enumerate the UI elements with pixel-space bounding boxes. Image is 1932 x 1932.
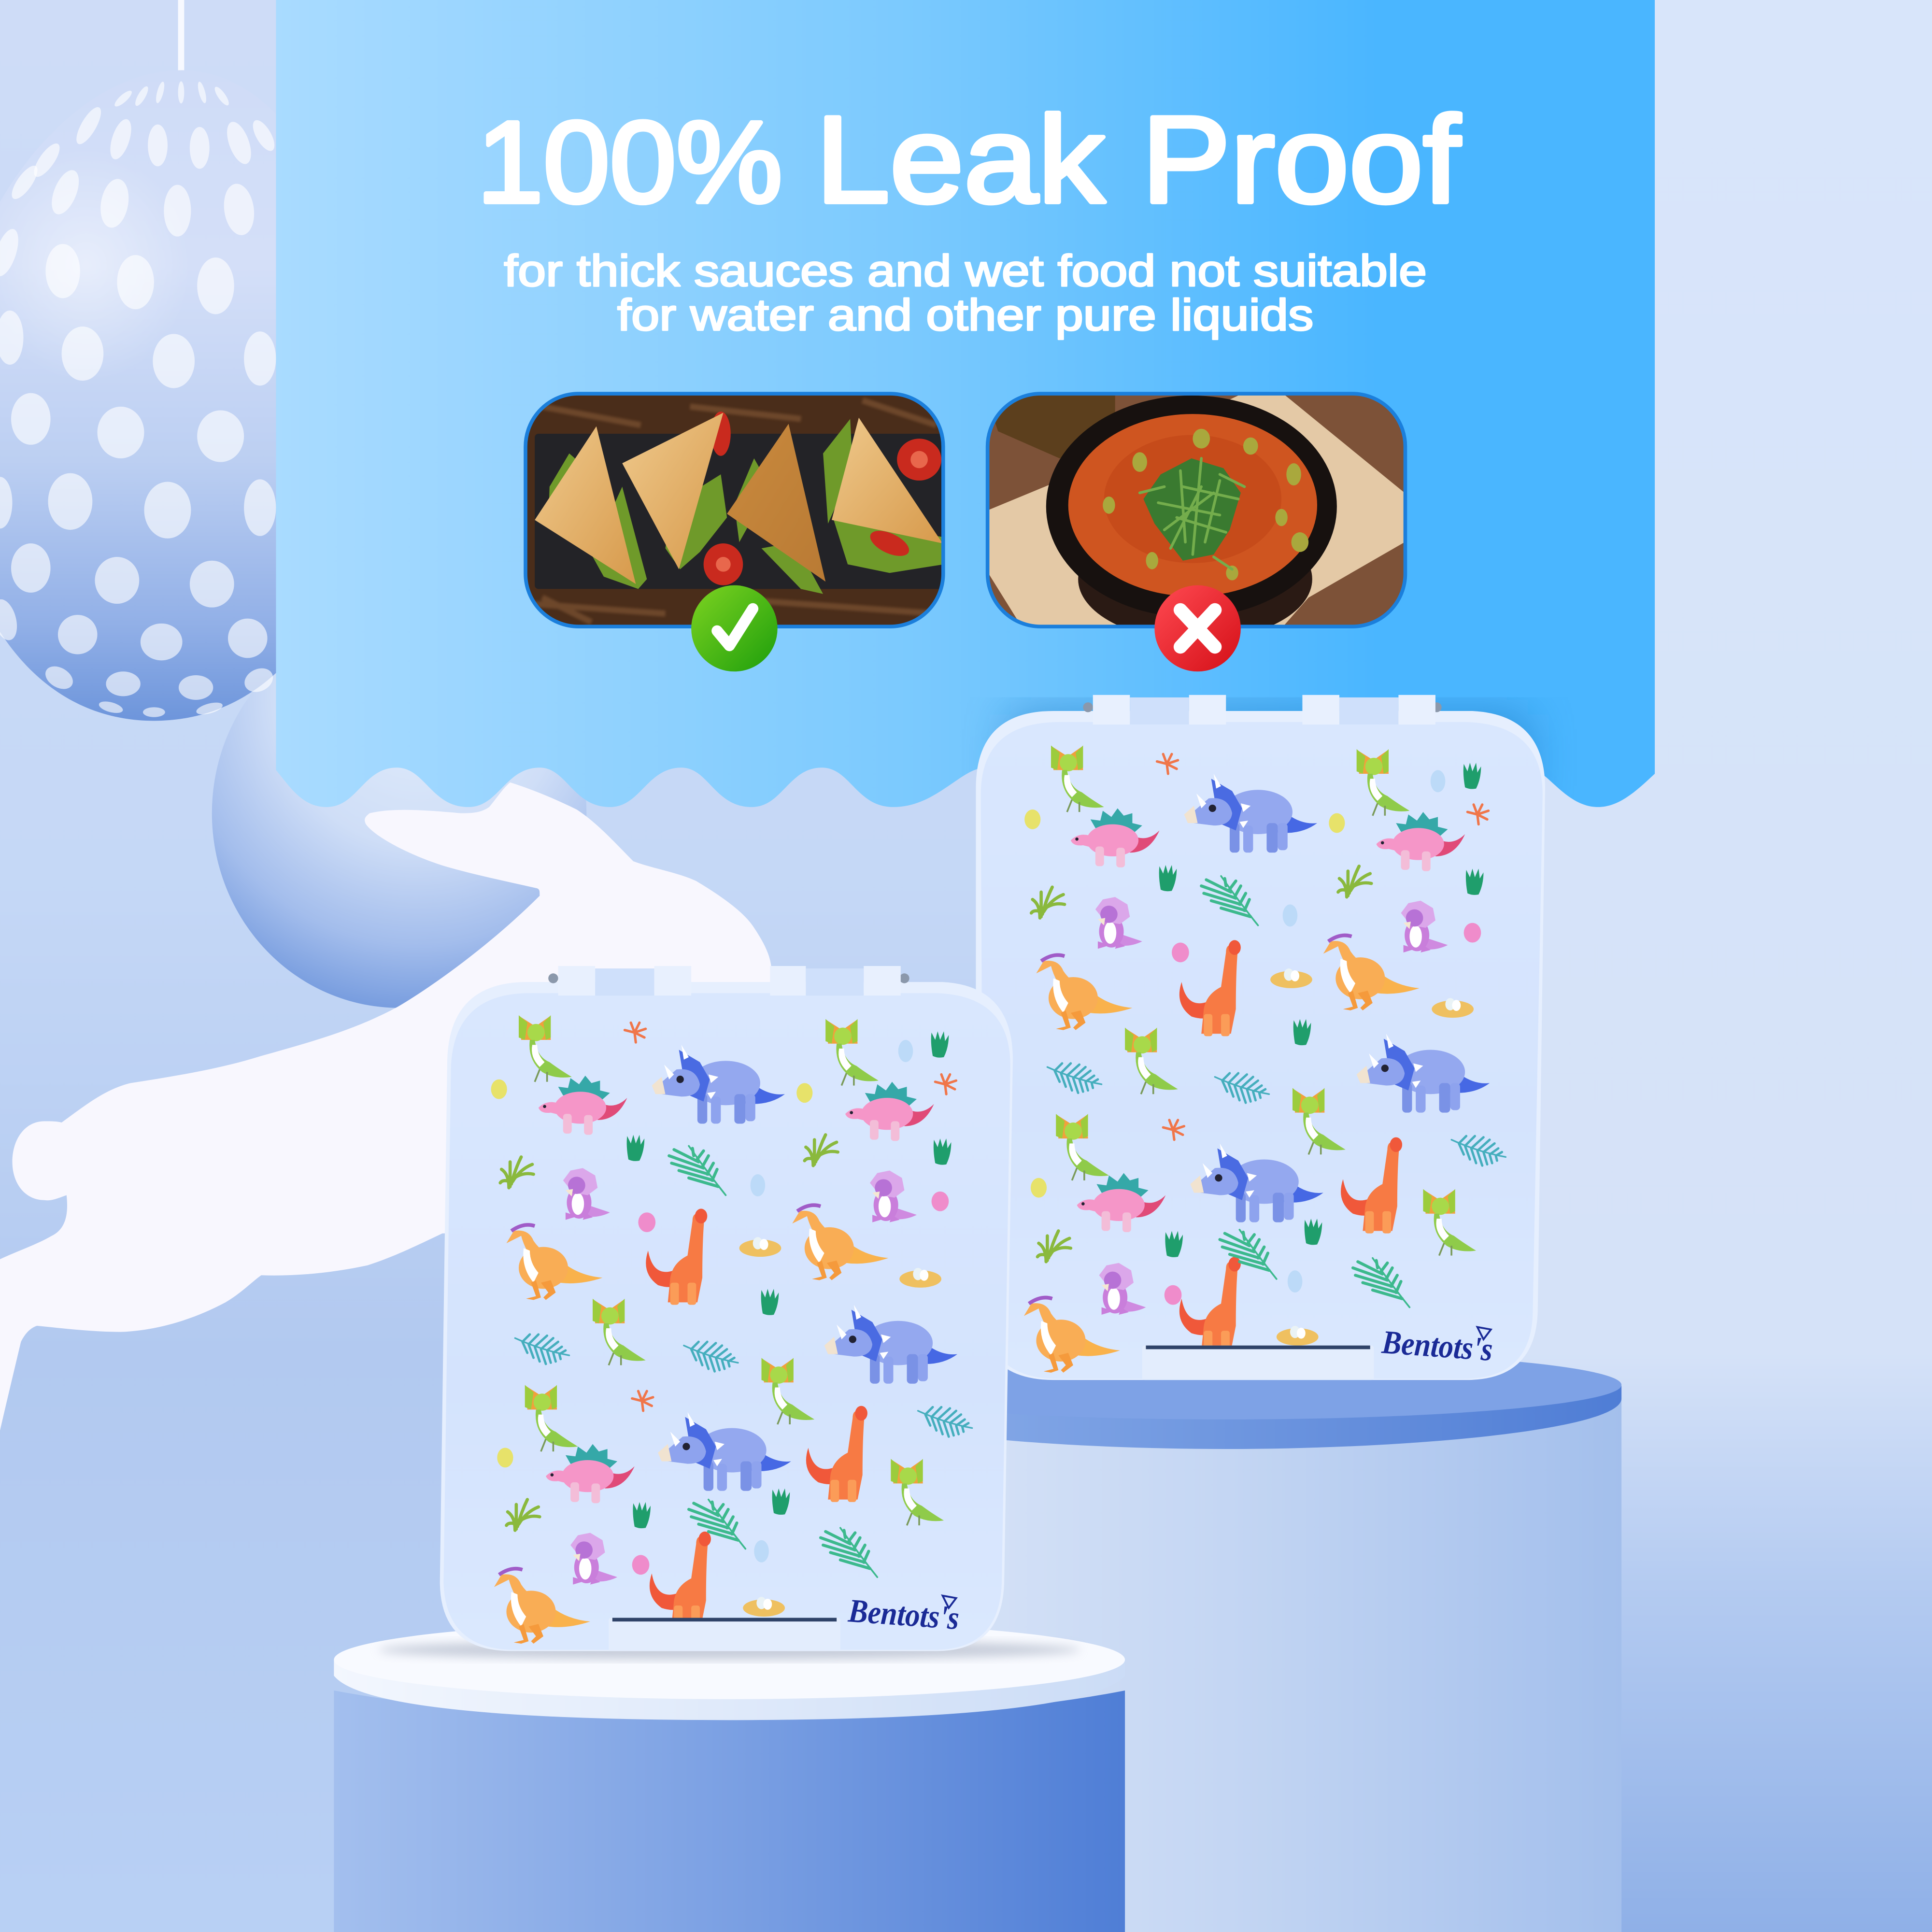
hinges [1083, 695, 1442, 724]
lunchbox front [440, 966, 1013, 1651]
brand logo: Bentots's [1380, 1323, 1494, 1368]
photo: sandwiches [524, 392, 945, 628]
lettuce [548, 419, 944, 594]
subtitle: for thick sauces and wet food not suitable [504, 246, 1427, 296]
dinosaur pattern [491, 1015, 972, 1644]
hanging decorative egg [0, 0, 369, 721]
hinges [548, 966, 909, 995]
panel shadow [1010, 715, 1528, 801]
subtitle [504, 246, 1427, 340]
rabbit silhouette [0, 782, 771, 1431]
latch [1142, 1346, 1374, 1380]
photo: soup [986, 392, 1407, 641]
box body [976, 711, 1545, 1380]
icon: red cross [1154, 585, 1241, 671]
podium front [334, 1620, 1125, 1932]
dinosaur pattern [1024, 745, 1506, 1373]
tomatoes [704, 412, 941, 585]
title [477, 91, 1461, 228]
large sphere behind rabbit [212, 619, 586, 1008]
icon: green check [691, 585, 778, 671]
lunchbox back [976, 695, 1545, 1380]
latch [609, 1618, 840, 1651]
podium back [830, 1350, 1621, 1932]
toast [535, 426, 636, 584]
herbs [1140, 458, 1245, 569]
title: 100% [477, 97, 782, 227]
subtitle: for water and other pure liquids [617, 291, 1313, 340]
wave panel [276, 0, 1655, 807]
brand logo: Bentots's [847, 1592, 960, 1636]
title: Leak Proof [816, 91, 1461, 228]
box body [440, 982, 1013, 1651]
